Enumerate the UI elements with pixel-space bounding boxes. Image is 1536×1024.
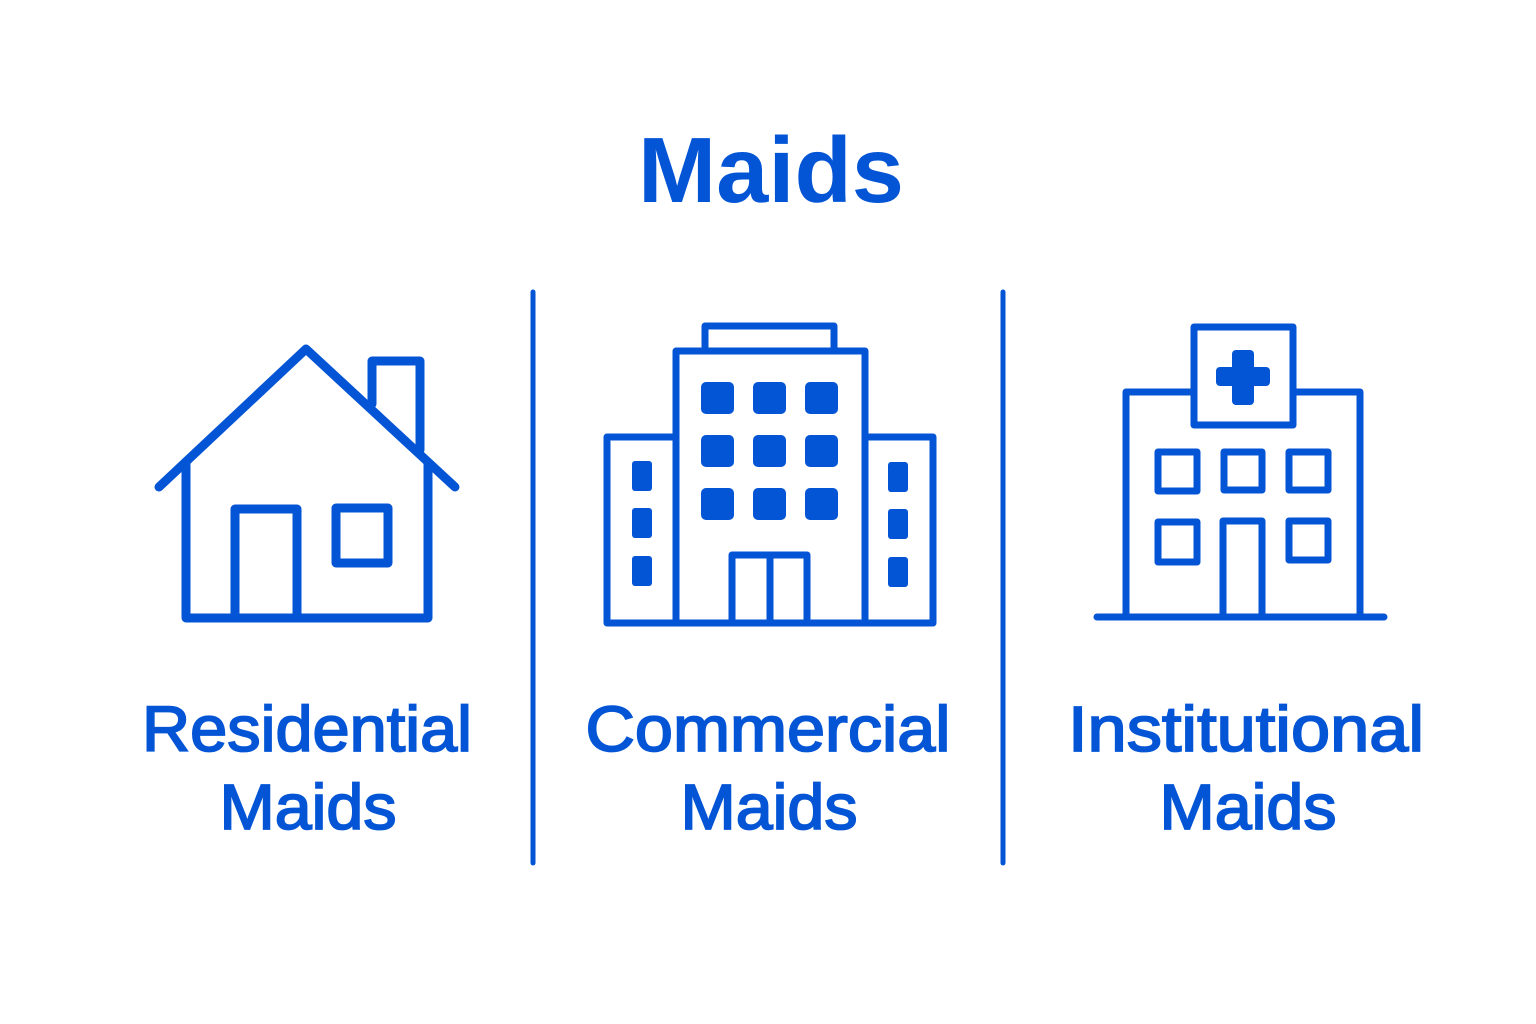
icon: house: [159, 349, 455, 618]
icon: office building: [607, 326, 933, 623]
divider: right: [1000, 292, 1006, 863]
label: institutional maids: Maids: [1160, 771, 1336, 843]
icon: hospital: [1097, 327, 1384, 617]
label: commercial maids: Commercial: [586, 693, 950, 765]
title: Maids: [638, 118, 904, 222]
label: institutional maids: Institutional: [1068, 693, 1424, 765]
label: commercial maids: [586, 693, 950, 843]
label: residential maids: Residential: [142, 693, 472, 765]
label: commercial maids: Maids: [680, 771, 858, 843]
label: institutional maids: [1068, 693, 1424, 843]
divider: left: [530, 292, 536, 863]
label: residential maids: [142, 693, 472, 843]
label: residential maids: Maids: [220, 771, 396, 843]
